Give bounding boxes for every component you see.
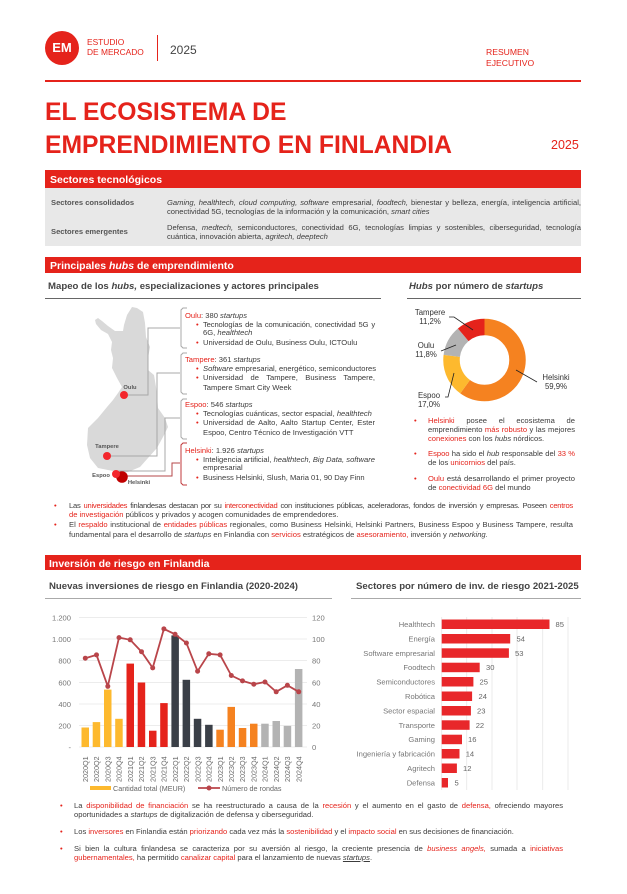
bullets: universities and institutions: Las universidades finlandesas destacan por su interconectividad con instituciones públicas, aceleradoras, fondos de inversión y empresas. Poseen centros (69, 501, 573, 510)
callout: Tampere (185, 355, 376, 392)
bullets: investment insights: • (60, 827, 63, 836)
brackets (180, 308, 187, 486)
callout: Helsinki: empresarial (203, 463, 243, 472)
callout: Tampere: Software empresarial, energético, semiconductores (203, 364, 376, 373)
quarter labels: 2023Q3 (238, 756, 247, 782)
callout: Helsinki: • (196, 455, 199, 464)
bar chart: sectors: 12 (463, 764, 471, 773)
marker: Espoo (92, 470, 120, 479)
quarter labels: 2022Q2 (182, 756, 191, 782)
quarter labels: 2023Q1 (216, 756, 225, 782)
heading: principales hubs (45, 257, 581, 273)
quarter labels: 2020Q3 (104, 756, 112, 782)
right axis: 20 (312, 722, 320, 730)
text: consolidados: conectividad 5G, tecnologías de la información y la comunicación, smart cities (167, 207, 430, 216)
callout: Tampere: Tampere Smart City Week (203, 383, 291, 392)
bullets: hub insights: conexiones con los hubs nórdicos. (428, 434, 544, 443)
marker: Espoo: Espoo (92, 473, 110, 479)
header divider (157, 35, 158, 61)
text: consolidados: Gaming, healthtech, cloud computing, software empresarial, foodtech, bienestar y belleza, energía, inteligencia artificial, (167, 198, 581, 207)
bars (82, 635, 302, 747)
donut chart: hubs by startups: Tampere (415, 308, 445, 317)
label: consolidados: Sectores consolidados (51, 198, 134, 207)
connectors (107, 328, 180, 476)
donut chart: hubs by startups: Espoo (418, 391, 441, 400)
quarter labels: 2021Q1 (126, 756, 135, 782)
icon: EM logo: EM (52, 40, 72, 55)
callout: Espoo: Universidad de Aalto, Aalto Startup Center, Ester (203, 418, 375, 427)
quarter labels: 2024Q1 (261, 756, 270, 782)
study label: DE MERCADO (87, 47, 144, 57)
study label: ESTUDIO (87, 37, 124, 47)
callout: Oulu: Universidad de Oulu, Business Oulu, ICTOulu (203, 338, 357, 347)
bar chart: sectors: 30 (486, 663, 494, 672)
executive summary label: RESUMEN (486, 47, 529, 57)
text: emergentes (167, 223, 581, 241)
left axis: 400 (58, 700, 71, 709)
bullets: hub insights: de los unicornios del país. (428, 458, 516, 467)
bar chart: sectors: Gaming (408, 735, 435, 744)
map of Finland with hub markers (87, 307, 180, 486)
bar chart: sectors: Semiconductores (376, 678, 435, 687)
bar chart: sectors: Defensa (407, 778, 436, 787)
bar chart: sectors: 5 (454, 778, 459, 787)
panel: sectores tecnologicos (45, 170, 581, 246)
executive summary label (486, 47, 534, 68)
bullets: investment insights: Los inversores en Finlandia están priorizando cada vez más la sostenibilidad y el impacto social en sus decisiones de financiación. (74, 827, 514, 836)
donut chart: hubs by startups: 59,9% (545, 382, 567, 391)
callout: Espoo: Espoo, Centro Técnico de Investigación VTT (203, 428, 354, 437)
quarter labels: 2022Q1 (171, 756, 180, 782)
donut chart: hubs by startups (415, 308, 570, 409)
marker: Tampere: Tampere (95, 444, 120, 450)
callout: Tampere: • (196, 373, 199, 382)
quarter labels: 2021Q4 (160, 756, 169, 782)
legend: Número de rondas (222, 784, 282, 793)
left axis: 600 (58, 678, 71, 688)
bullets: hub insights: Espoo ha sido el hub responsable del 33 % (428, 449, 575, 458)
donut chart: hubs by startups: 17,0% (418, 400, 440, 409)
bullets: hub insights: • (414, 474, 417, 483)
marker: Tampere (95, 444, 120, 460)
right axis: 0 (312, 743, 316, 752)
right axis: 120 (312, 614, 325, 622)
quarter labels: 2020Q1 (81, 756, 90, 782)
bullets: hub insights: Helsinki posee el ecosistema de (428, 416, 575, 425)
right axis: 40 (312, 700, 320, 709)
executive summary label: EJECUTIVO (486, 58, 534, 68)
label: emergentes: Sectores emergentes (51, 227, 128, 236)
donut chart: hubs by startups: Oulu (418, 341, 434, 350)
bullets: universities and institutions (54, 501, 573, 539)
bullets: investment insights: • (60, 844, 63, 853)
bar chart: sectors: 25 (480, 678, 488, 687)
bar chart: sectors (356, 617, 568, 790)
callout: Helsinki: Inteligencia artificial, healthtech, Big Data, software (203, 455, 375, 464)
callout: Tampere: Universidad de Tampere, Business Tampere, (203, 373, 375, 382)
marker: Oulu: Oulu (123, 385, 137, 391)
legend (90, 784, 282, 793)
text: emergentes: cuántica, innovación abierta, agritech, deeptech (167, 232, 328, 241)
marker: Helsinki: Helsinki (128, 480, 151, 486)
bullets: universities and institutions: de investigación públicos y privados y acogen comunidades de emprendedores. (69, 510, 338, 519)
bar chart: sectors: Transporte (399, 721, 435, 730)
subheading: nuevas inversiones: Nuevas inversiones de riesgo en Finlandia (2020-2024) (49, 581, 298, 592)
bullets: universities and institutions: • (54, 520, 57, 529)
quarter labels: 2024Q2 (272, 756, 281, 782)
callout: Oulu: Tecnologías de la comunicación, conectividad 5G y (203, 320, 375, 329)
callout: Helsinki (185, 446, 375, 482)
bar chart: sectors: Agritech (407, 764, 435, 773)
quarter labels (81, 756, 303, 782)
left axis: 1.000 (52, 635, 71, 644)
marker: Helsinki (116, 471, 151, 486)
left axis: 800 (58, 656, 71, 666)
bullets: investment insights: La disponibilidad de financiación se ha reestructurado a causa de la recesión y el aumento en el gasto de defensa, ofreciendo mayores (74, 801, 563, 810)
bar chart: sectors: Robótica (405, 692, 436, 701)
bullets: hub insights: • (414, 416, 417, 425)
text: emergentes: Defensa, medtech, semiconductores, conectividad 6G, tecnologías limpias y sostenibles, ciberseguridad, tecnología (167, 223, 581, 232)
heading: sectores tecnologicos (45, 170, 581, 188)
callout: Espoo (185, 400, 375, 437)
bar chart: sectors: Foodtech (403, 663, 435, 672)
subheading: mapeo: Mapeo de los hubs, especializaciones y actores principales (48, 281, 319, 292)
bar chart: sectors: 85 (556, 620, 564, 629)
quarter labels: 2022Q4 (204, 756, 214, 782)
bar chart: sectors: Ingeniería y fabricación (356, 750, 435, 759)
callout: Tampere: Tampere: 361 startups (185, 355, 261, 364)
right axis: 60 (312, 678, 320, 688)
left axis (52, 614, 71, 752)
bullets: investment insights: oportunidades a startups de digitalización de defensa y ciberseguridad. (74, 810, 313, 819)
bullets: hub insights: • (414, 449, 417, 458)
bar chart: sectors: Sector espacial (383, 706, 435, 715)
callout: Tampere: • (196, 364, 199, 373)
header: logo and study label (45, 31, 197, 65)
legend: Cantidad total (MEUR) (113, 784, 185, 793)
bullets: hub insights: Oulu está desarrollando el primer proyecto (428, 474, 575, 483)
map outline (87, 307, 168, 473)
callout: Oulu: Oulu: 380 startups (185, 311, 247, 320)
bullets: universities and institutions: fundamental para el desarrollo de startups en Finlandia con servicios estratégicos de asesoramiento, inversión y networking. (69, 530, 488, 539)
title: EMPRENDIMIENTO EN FINLANDIA (45, 132, 452, 158)
line: rounds (83, 626, 301, 694)
left axis: 1.200 (52, 614, 71, 622)
bullets: investment insights: • (60, 801, 63, 810)
subheading: sectores por numero: Sectores por número de inv. de riesgo 2021-2025 (356, 581, 579, 592)
bar chart: sectors: Healthtech (399, 620, 435, 629)
donut chart: hubs by startups: 11,8% (415, 350, 437, 359)
text: consolidados (167, 198, 581, 216)
header rule (45, 80, 581, 82)
callout: Helsinki: • (196, 473, 199, 482)
bar chart: sectors: Energía (408, 634, 436, 643)
header year: 2025 (170, 43, 197, 57)
quarter labels: 2023Q2 (227, 756, 236, 782)
callout: Espoo: • (196, 409, 199, 418)
callout: Oulu: 6G, healthtech (203, 328, 252, 337)
quarter labels: 2023Q4 (250, 756, 258, 782)
title (45, 99, 452, 158)
donut chart: hubs by startups: Helsinki (542, 373, 570, 382)
title year: 2025 (551, 138, 579, 152)
bullets: hub insights: de conectividad 6G del mundo (428, 483, 531, 492)
right axis: 100 (312, 635, 325, 644)
quarter labels: 2020Q4 (115, 756, 124, 782)
study label (87, 37, 144, 57)
callout: Espoo: • (196, 418, 199, 427)
heading: sectores tecnologicos: Sectores tecnológicos (50, 174, 162, 186)
heading: principales hubs: Principales hubs de emprendimiento (50, 260, 234, 272)
quarter labels: 2024Q3 (283, 756, 292, 782)
bullets: hub insights (414, 416, 575, 492)
quarter labels: 2024Q4 (294, 756, 303, 782)
bar chart: sectors: 54 (516, 634, 525, 643)
right axis: 80 (312, 656, 320, 666)
heading: inversion de riesgo (45, 555, 581, 570)
bar chart: sectors: 14 (466, 750, 474, 759)
bullets: investment insights: gubernamentales, ha permitido canalizar capital para el lanzamiento de nuevas startups. (74, 853, 372, 862)
heading: inversion de riesgo: Inversión de riesgo en Finlandia (49, 558, 209, 570)
bar chart: sectors: 16 (468, 735, 476, 744)
callout: Oulu: • (196, 338, 199, 347)
bullets: investment insights: Si bien la cultura finlandesa se caracteriza por su aversión al riesgo, la creciente presencia de business angels, sumada a iniciativas (74, 844, 563, 853)
donut chart: hubs by startups: 11,2% (419, 317, 441, 326)
callout: Helsinki: Helsinki: 1.926 startups (185, 446, 264, 455)
bar chart: sectors: 22 (476, 721, 484, 730)
callout: Helsinki: Business Helsinki, Slush, Maria 01, 90 Day Finn (203, 473, 365, 482)
bullets: universities and institutions: • (54, 501, 57, 510)
callout: Oulu: • (196, 320, 199, 329)
bullets: hub insights: emprendimiento más robusto y las mejores (428, 425, 575, 434)
callout: Espoo: Tecnologías cuánticas, sector espacial, healthtech (203, 409, 372, 418)
title: EL ECOSISTEMA DE (45, 99, 286, 126)
subheading: hubs por numero: Hubs por número de startups (409, 281, 543, 292)
icon: EM logo (45, 31, 79, 65)
quarter labels: 2021Q3 (148, 756, 157, 782)
bar chart: sectors: Software empresarial (363, 649, 435, 658)
bar chart: sectors: 53 (515, 649, 523, 658)
bullets: investment insights (60, 801, 563, 862)
quarter labels: 2020Q2 (92, 756, 101, 782)
quarter labels: 2021Q2 (137, 756, 146, 782)
quarter labels: 2022Q3 (193, 756, 202, 782)
marker: Oulu (120, 385, 137, 399)
bar chart: sectors: 23 (477, 706, 485, 715)
left axis: - (68, 743, 71, 752)
callout: Oulu (185, 311, 376, 347)
bullets: universities and institutions: El respaldo institucional de entidades públicas regionales, como Business Helsinki, Helsinki Partners, Business Espoo y Business Tampere, resulta (69, 520, 573, 529)
callout: Espoo: Espoo: 546 startups (185, 400, 253, 409)
left axis: 200 (58, 722, 71, 730)
combo chart: investment and rounds (52, 614, 325, 793)
right axis (312, 614, 325, 752)
bar chart: sectors: 24 (478, 692, 487, 701)
